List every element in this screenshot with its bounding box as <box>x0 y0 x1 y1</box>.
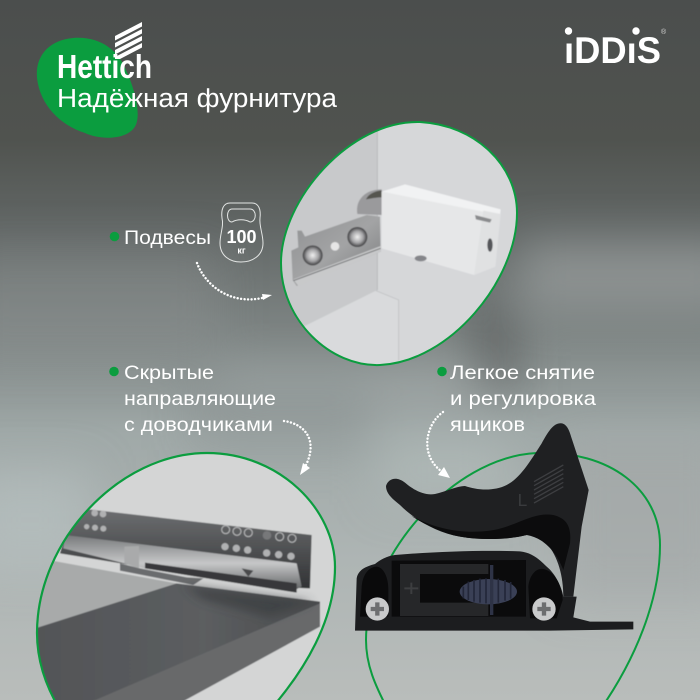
arrow: to hanger <box>197 263 272 300</box>
metal bracket <box>291 215 381 286</box>
hanger photo <box>282 123 516 364</box>
plus sign <box>404 583 418 594</box>
screws <box>366 597 556 621</box>
label text: с доводчиками <box>124 414 273 436</box>
registered mark: ® <box>661 28 667 36</box>
lever letter: L <box>518 490 528 510</box>
label text: направляющие <box>124 388 276 410</box>
ball joint <box>357 189 382 215</box>
green blob behind logo <box>37 38 138 138</box>
mechanism window <box>392 560 526 617</box>
circle outline <box>281 122 517 365</box>
Hettich logo <box>57 22 152 85</box>
white block <box>382 184 501 216</box>
label: Легкое снятие <box>437 362 596 436</box>
icon: kettlebell 100 kg: кг <box>237 246 246 256</box>
lever ribs <box>534 465 563 503</box>
label: Скрытые направляющие <box>109 362 276 436</box>
photo circle: runner <box>36 452 336 700</box>
bullet <box>437 367 447 376</box>
rail back plate <box>60 508 312 588</box>
circle outline <box>37 453 335 700</box>
icon: kettlebell 100 kg <box>220 203 263 262</box>
iddis wordmark: ıDDıS <box>564 30 661 71</box>
title: Надёжная фурнитура <box>57 85 338 113</box>
photo: drawer clip <box>355 423 633 631</box>
arrow: to clip <box>427 412 450 478</box>
logo wordmark: Hettich <box>57 48 152 85</box>
label text: ящиков <box>450 414 525 436</box>
logo stripes <box>115 22 142 59</box>
clip lever <box>386 423 589 597</box>
runner photo <box>38 454 334 700</box>
bullet <box>110 232 119 241</box>
arrow: to slides <box>284 421 311 475</box>
bullet <box>109 367 119 376</box>
iddis logo <box>564 27 667 71</box>
screw recesses <box>360 567 388 617</box>
gear <box>460 565 517 615</box>
clip base <box>355 551 633 631</box>
photo circle: hanger <box>280 121 518 366</box>
logo i dots <box>565 27 640 35</box>
holes upper <box>222 526 296 542</box>
label text: и регулировка <box>450 388 596 410</box>
icon: kettlebell 100 kg: 100 <box>226 227 257 247</box>
label text: Скрытые <box>124 362 214 384</box>
shelf <box>30 583 320 700</box>
circle outline: clip <box>366 453 660 700</box>
rail tube <box>63 535 302 592</box>
label: Подвесы <box>110 227 211 249</box>
label text: Легкое снятие <box>450 362 595 384</box>
label text: Подвесы <box>124 227 211 249</box>
